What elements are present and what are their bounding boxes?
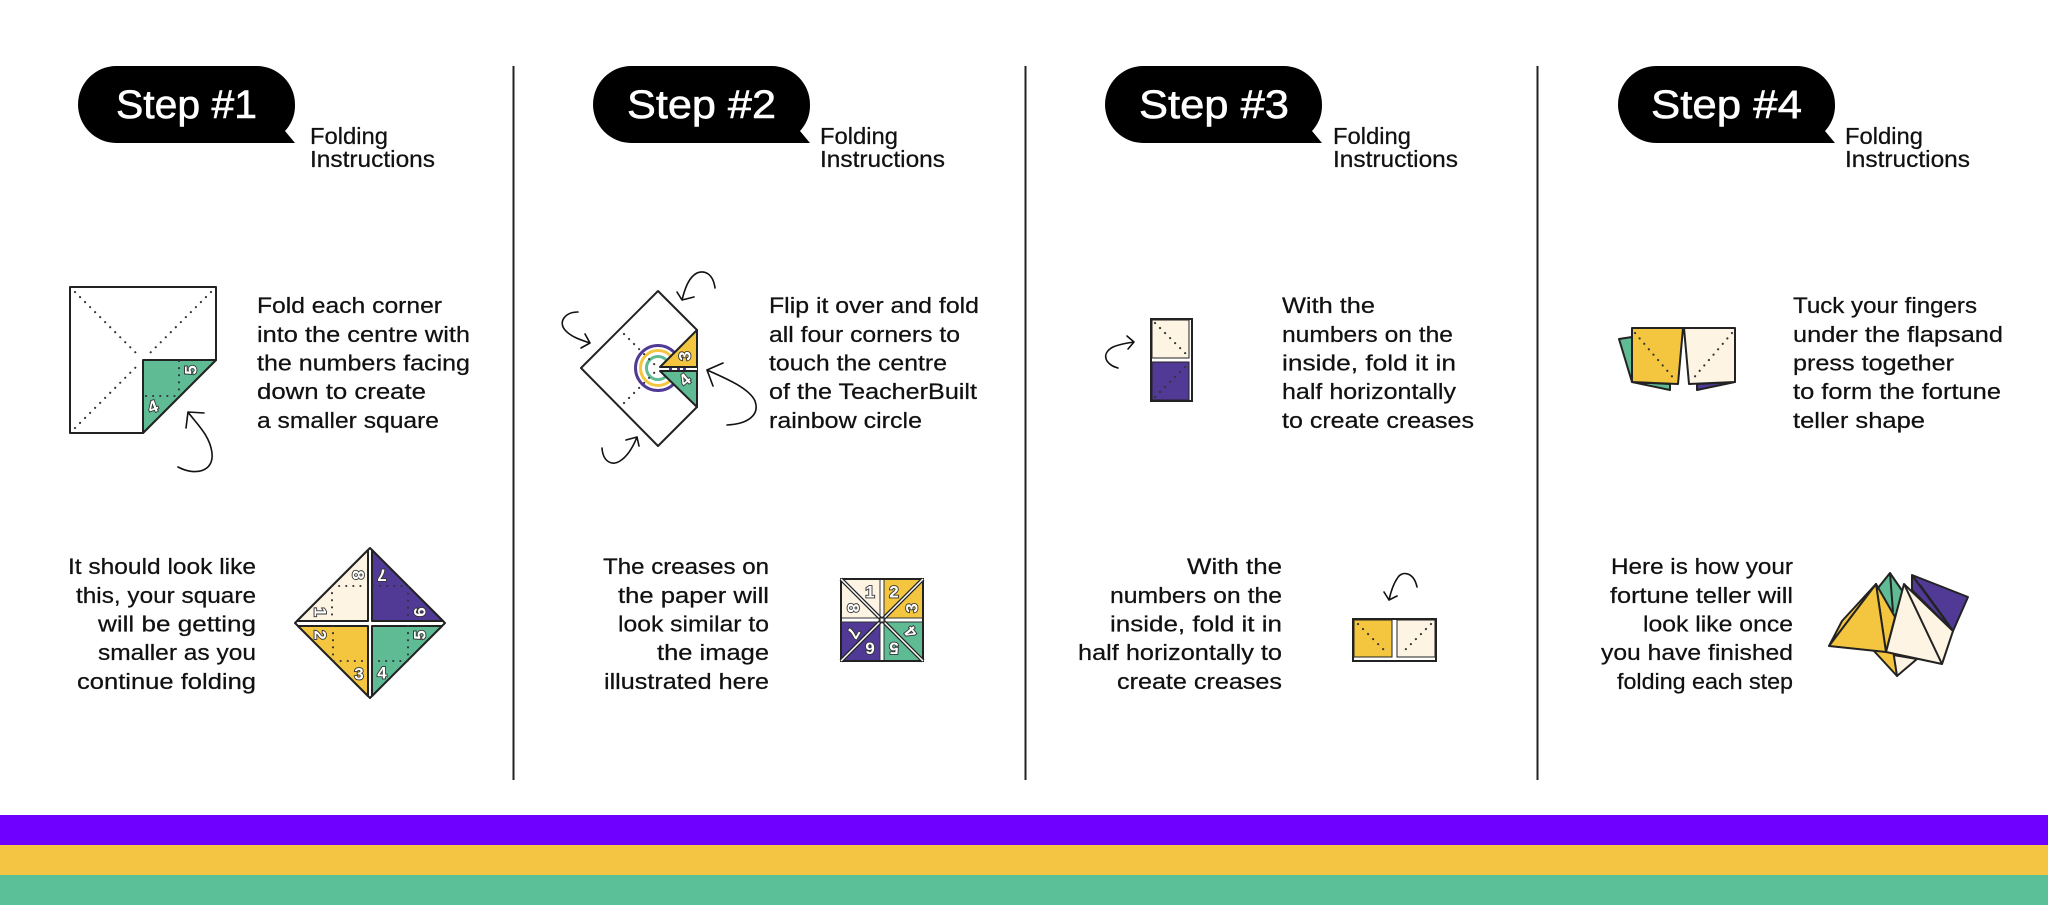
icon: four colour diamond: 8 [348,570,368,580]
subheading: folding instructions: Instructions [1845,146,1970,172]
text: fold in half horizontally second [1078,554,1282,694]
icon: creased numbered square: 8 [844,603,862,613]
icon: four colour diamond: 7 [377,566,387,584]
text: tuck your fingers: Tuck your fingers [1793,293,1977,318]
text: it should look like this: smaller as you [98,640,256,665]
icon: creased numbered square: 5 [889,638,899,658]
icon: creased numbered square: 1 [865,582,875,602]
subheading: folding instructions: Instructions [1333,146,1458,172]
text: the creases on the paper: The creases on [603,554,769,579]
heading: step 1 speech bubble: Step #1 [116,83,257,127]
text: the creases on the paper: look similar to [618,612,769,636]
panel: step 4 [1601,66,2003,694]
panel: step 2 [562,66,979,694]
subheading: folding instructions: Instructions [820,146,945,172]
text: here is how your fortune teller will look: fortune teller will [1610,583,1793,608]
text: it should look like this: It should look like [68,554,256,579]
text: the creases on the paper: the paper will [618,583,769,608]
subheading: folding instructions: Folding [1333,123,1411,149]
text: the creases on the paper [603,554,769,694]
icon: flipped paper with rainbow circle and four arrows: 4 [675,369,695,390]
icon: horizontal yellow and cream fold [1353,574,1436,661]
subheading: folding instructions: Instructions [310,146,435,172]
icon: four colour diamond: 6 [410,607,430,617]
subheading: folding instructions: Folding [820,123,898,149]
heading: step 3 speech bubble: Step #3 [1139,83,1289,127]
icon: four colour diamond [295,548,445,698]
text: fold each corner: into the centre with [257,322,470,347]
text: here is how your fortune teller will look: Here is how your [1611,554,1794,579]
icon: finished fortune teller [1829,573,1968,676]
text: fold in half horizontally second: numbers on the [1110,583,1282,608]
text: fold each corner: a smaller square [257,408,439,433]
icon: square with one corner folded [70,287,216,472]
panel: step 3 [1078,66,1474,694]
icon: creased numbered square: 3 [902,603,922,613]
icon: creased numbered square [841,579,923,661]
text: tuck your fingers: teller shape [1793,408,1925,433]
text: flip it over: all four corners to [769,322,960,347]
text: the creases on the paper: the image [657,640,769,665]
icon: four colour diamond: 5 [410,630,430,640]
text: fold in half horizontally: half horizontally [1282,379,1457,404]
text: it should look like this: will be getting [97,612,256,636]
text: the creases on the paper: illustrated here [604,669,769,694]
text: fold in half horizontally [1282,293,1474,433]
text: flip it over: rainbow circle [769,408,922,433]
text: fold each corner: Fold each corner [257,293,443,318]
text: tuck your fingers: press together [1793,350,1955,376]
icon: flipped paper with rainbow circle and four arrows [562,272,756,463]
text: fold in half horizontally: to create creases [1282,408,1474,433]
icon: four colour diamond: 2 [310,630,330,640]
text: tuck your fingers: to form the fortune [1793,379,2001,404]
text: it should look like this [68,554,256,694]
icon: creased numbered square: 4 [900,622,921,642]
text: flip it over: Flip it over and fold [769,293,979,318]
heading: step 4 speech bubble: Step #4 [1651,83,1802,127]
heading: step 2 speech bubble [593,66,810,143]
icon: four colour diamond: 4 [377,664,387,682]
icon: two flaps pressed together [1619,328,1735,390]
text: here is how your fortune teller will look: you have finished [1601,640,1793,665]
panel: step 1 [68,66,470,698]
text: fold in half horizontally second: create creases [1117,669,1282,694]
rainbow stripe footer [0,815,2048,905]
text: fold in half horizontally second: half horizontally to [1078,640,1282,665]
text: tuck your fingers: under the flapsand [1793,322,2003,347]
text: fold in half horizontally: inside, fold it in [1282,350,1456,376]
icon: square with one corner folded: 4 [145,396,161,418]
subheading: folding instructions [1333,123,1458,172]
heading: step 1 speech bubble [78,66,295,143]
text: fold in half horizontally second: With the [1187,554,1282,579]
heading: step 4 speech bubble [1618,66,1835,143]
text: here is how your fortune teller will look [1601,554,1794,694]
text: it should look like this: continue folding [77,669,256,694]
icon: creased numbered square: 6 [865,638,875,658]
text: flip it over: of the TeacherBuilt [769,379,978,404]
text: tuck your fingers [1793,293,2003,433]
text: fold each corner [257,293,470,433]
text: fold in half horizontally: With the [1282,293,1375,318]
subheading: folding instructions [820,123,945,172]
icon: four colour diamond: 1 [310,607,330,617]
icon: vertical cream and purple fold [1106,319,1192,401]
icon: square with one corner folded: 5 [182,365,200,375]
text: here is how your fortune teller will look: folding each step [1617,669,1793,694]
subheading: folding instructions [1845,123,1970,172]
heading: step 3 speech bubble [1105,66,1322,143]
icon: flipped paper with rainbow circle and four arrows: 3 [676,351,694,361]
subheading: folding instructions: Folding [310,123,388,149]
text: fold in half horizontally: numbers on the [1282,322,1453,347]
subheading: folding instructions: Folding [1845,123,1923,149]
icon: creased numbered square: 7 [842,624,864,642]
text: fold in half horizontally second: inside, fold it in [1110,612,1282,636]
heading: step 2 speech bubble: Step #2 [627,83,776,127]
icon: creased numbered square: 2 [889,582,899,602]
text: here is how your fortune teller will look: look like once [1643,612,1793,636]
text: flip it over: touch the centre [769,350,947,376]
text: fold each corner: the numbers facing [257,350,470,376]
text: it should look like this: this, your square [76,583,256,608]
icon: four colour diamond: 3 [354,664,364,684]
subheading: folding instructions [310,123,435,172]
text: flip it over [769,293,979,433]
text: fold each corner: down to create [257,379,426,404]
